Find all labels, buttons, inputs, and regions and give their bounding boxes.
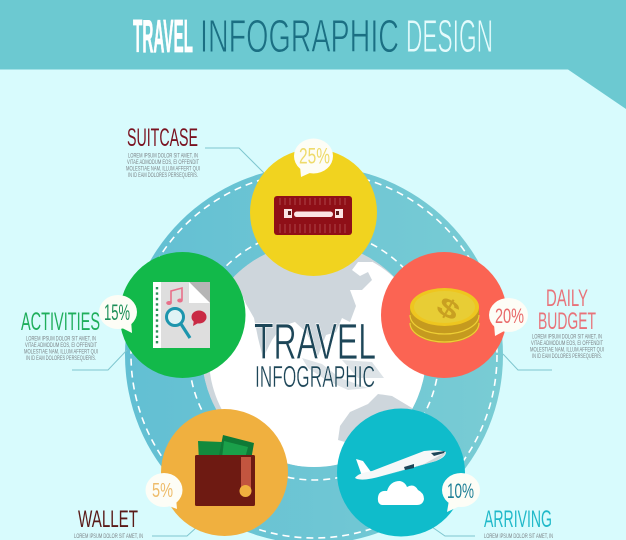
bubble: 20% xyxy=(489,298,528,336)
icon: coins xyxy=(410,288,479,343)
text block: suitcase xyxy=(126,152,200,179)
leader lines xyxy=(72,148,552,536)
text block: wallet: LOREM IPSUM DOLOR SIT AMET, IN xyxy=(74,533,143,540)
header banner xyxy=(0,0,626,109)
icon: document xyxy=(153,282,210,348)
icon: coins: $ xyxy=(432,290,465,326)
heading: arriving: ARRIVING xyxy=(484,506,552,533)
bubble: 15% xyxy=(99,295,137,333)
bubble: 5% xyxy=(146,473,182,509)
bubble: 10%: 10% xyxy=(447,480,474,503)
text block: suitcase: IN ID EAM DOLORES PERSEQUERIS. xyxy=(128,172,198,179)
title: INFOGRAPHIC xyxy=(200,10,399,62)
heading: activities: ACTIVITIES xyxy=(21,308,100,336)
panel: wallet xyxy=(74,409,288,540)
text block: suitcase: LOREM IPSUM DOLOR SIT AMET, IN xyxy=(128,152,198,160)
continent: islands xyxy=(302,358,384,390)
heading: daily budget: DAILY xyxy=(546,285,588,312)
bubble: 20%: 20% xyxy=(495,305,524,328)
green circle xyxy=(120,252,246,378)
text block: activities xyxy=(24,336,98,362)
text block: suitcase: MOLESTIAE NAM, ILLUM AFFERT QUI xyxy=(126,166,200,172)
teal route ring xyxy=(125,166,503,540)
icon: plane xyxy=(355,450,446,480)
bubble: 25% xyxy=(294,138,333,177)
heading: suitcase: SUITCASE xyxy=(127,124,198,152)
icon: wallet xyxy=(195,435,255,506)
center title xyxy=(254,313,376,394)
blue circle xyxy=(337,408,465,536)
bubble: 10% xyxy=(442,473,480,512)
title: TRAVEL xyxy=(133,10,193,62)
heading: daily budget xyxy=(538,285,596,335)
text block: activities: LOREM IPSUM DOLOR SIT AMET, IN xyxy=(26,336,96,342)
text block: activities: MOLESTIAE NAM, ILLUM AFFERT QUI xyxy=(24,348,98,356)
icon: suitcase xyxy=(274,196,352,235)
continent: Asia xyxy=(234,254,372,356)
center title: INFOGRAPHIC xyxy=(255,360,375,394)
red circle xyxy=(381,252,507,378)
panel: activities xyxy=(21,252,246,378)
center title: TRAVEL xyxy=(254,313,376,370)
text block: daily budget xyxy=(530,334,604,360)
heading: wallet: WALLET xyxy=(78,506,138,533)
icon: cloud xyxy=(378,481,424,505)
bubble: 15%: 15% xyxy=(104,300,130,325)
yellow circle xyxy=(250,149,377,276)
panel: suitcase xyxy=(126,124,377,276)
text: DESIGN xyxy=(406,10,493,62)
continent: Australia xyxy=(338,394,412,442)
text block: activities: VITAE ADMODUM EOS, EI OFFENDIT xyxy=(25,342,97,349)
bubble: 25%: 25% xyxy=(299,144,330,168)
bubble: 5%: 5% xyxy=(152,480,173,502)
orange circle xyxy=(161,409,288,536)
globe xyxy=(202,240,430,468)
panel: arriving xyxy=(337,408,553,540)
panel: daily budget xyxy=(381,252,604,378)
text block: activities: IN ID EAM DOLORES PERSEQUERIS. xyxy=(26,355,96,362)
text block: suitcase: VITAE ADMODUM EOS, EI OFFENDIT xyxy=(127,159,199,166)
text block: arriving: LOREM IPSUM DOLOR SIT AMET, IN xyxy=(484,533,553,540)
